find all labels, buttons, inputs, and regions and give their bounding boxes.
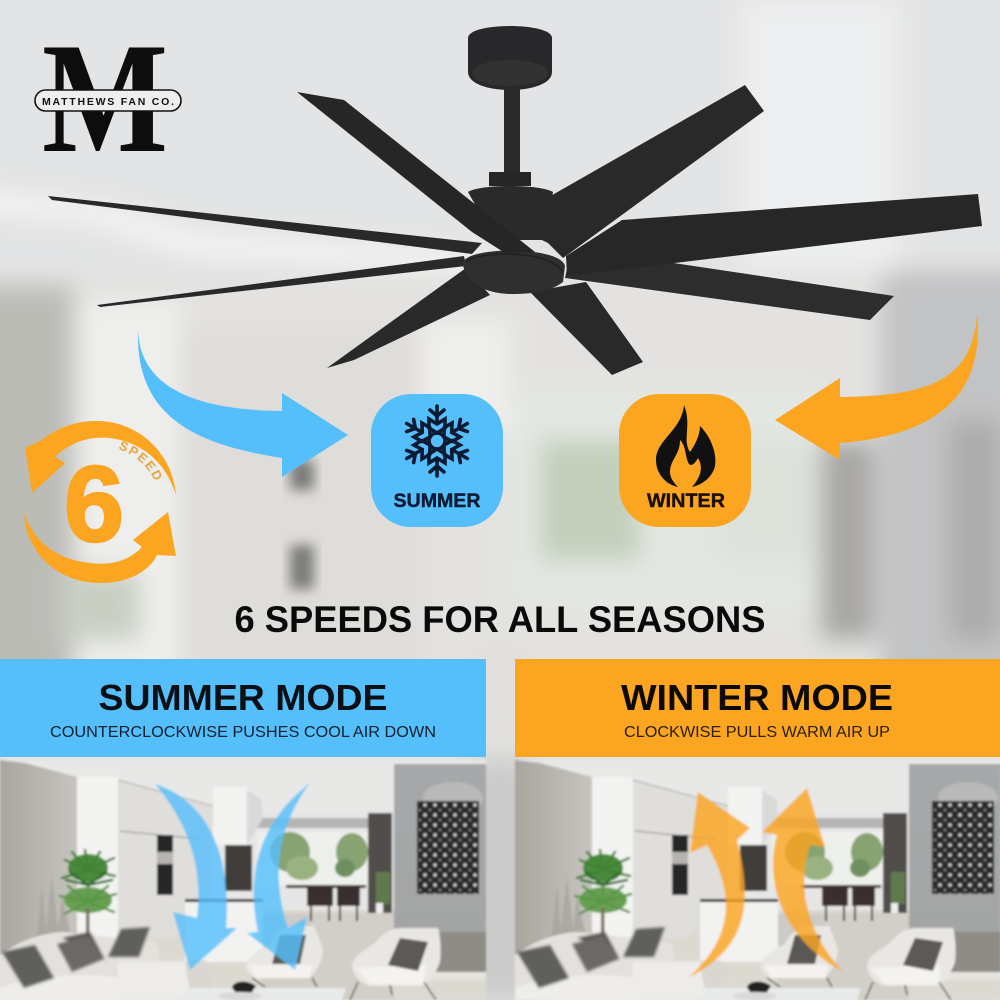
fan mount and downrod xyxy=(468,26,553,240)
blade: bottom xyxy=(530,282,643,375)
panel: winter mode: WINTER MODE xyxy=(621,677,893,718)
blade: right lower xyxy=(565,254,894,320)
icon: snowflake xyxy=(403,406,471,476)
icon: 6 speed xyxy=(24,421,176,583)
room photo: summer airflow xyxy=(0,760,486,1000)
heading: 6 SPEEDS FOR ALL SEASONS xyxy=(234,599,766,640)
panel: summer mode: COUNTERCLOCKWISE PUSHES COOL AIR DOWN xyxy=(50,724,436,741)
blade: right long xyxy=(566,194,982,276)
arrow: orange into winter badge xyxy=(775,315,978,460)
badge: summer xyxy=(371,394,503,527)
logo: Matthews Fan Co.: MATTHEWS FAN CO. xyxy=(42,96,174,108)
bottom rotating arrow xyxy=(24,512,176,583)
panel: winter mode xyxy=(515,659,1000,757)
badge: summer: SUMMER xyxy=(394,490,480,512)
panel: summer mode: SUMMER MODE xyxy=(98,677,388,718)
logo: Matthews Fan Co.: M xyxy=(42,11,168,186)
panel: winter mode: CLOCKWISE PULLS WARM AIR UP xyxy=(624,724,890,741)
arrow: cool air down left xyxy=(155,784,237,970)
blade: bottom left xyxy=(327,268,490,368)
room photo: winter airflow xyxy=(515,760,1000,1000)
badge: winter: WINTER xyxy=(647,490,725,512)
arrow: cool air down right xyxy=(247,783,310,970)
arrow: warm air up left xyxy=(688,792,750,978)
ceiling fan xyxy=(48,26,982,375)
arrow: warm air up right xyxy=(762,788,843,972)
badge: winter xyxy=(619,394,751,527)
arrow: blue into summer badge xyxy=(138,330,348,477)
icon: 6 speed: SPEED xyxy=(119,442,162,480)
icon: 6 speed: 6 xyxy=(64,443,124,564)
blade: top left wide xyxy=(297,92,535,253)
blade: top right wide xyxy=(505,85,764,258)
hub xyxy=(463,250,565,294)
panel: summer mode xyxy=(0,659,486,757)
blade: left lower thin xyxy=(97,256,466,307)
top rotating arrow xyxy=(25,421,176,495)
icon: flame xyxy=(656,405,715,487)
blade: left upper thin xyxy=(48,196,482,254)
